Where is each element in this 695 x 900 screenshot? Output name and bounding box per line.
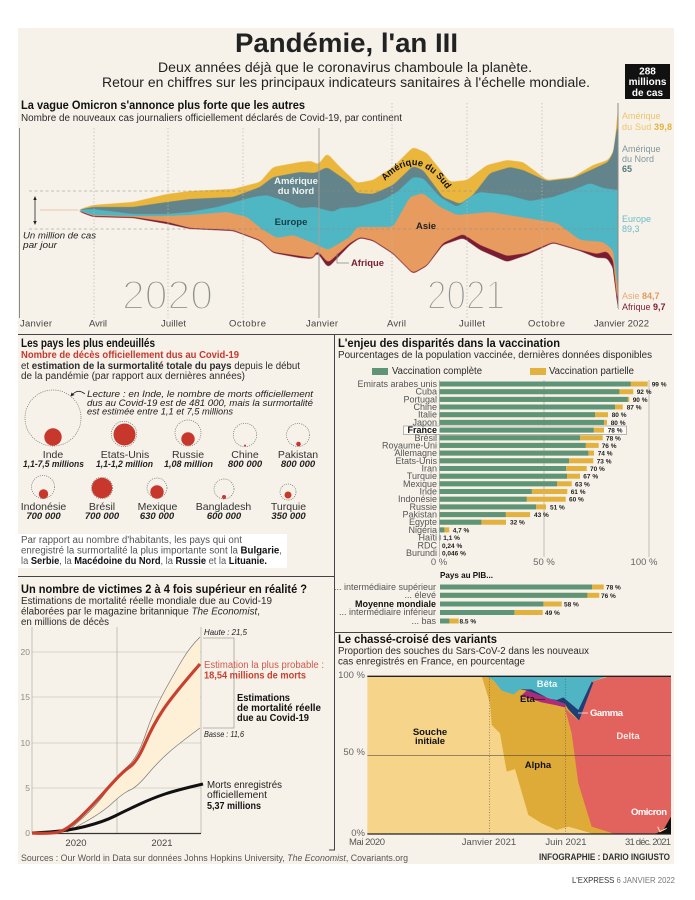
subtitle: Deux années déjà que le coronavirus chamboule la planète. xyxy=(158,60,532,75)
row: Indonésie xyxy=(398,494,584,504)
subtitle xyxy=(102,60,590,90)
stream chart xyxy=(40,114,618,310)
row: Egypte: 32 % xyxy=(510,520,525,527)
scale label: par jour xyxy=(22,240,58,250)
circle: Pakistan: 800 000 xyxy=(281,459,316,470)
legend: Vaccination complète xyxy=(392,366,482,377)
row: Cuba: Cuba xyxy=(415,387,437,397)
row: Haïti: 1,1 % xyxy=(443,535,460,542)
circle: Brésil: Brésil xyxy=(89,501,115,513)
label: Amérique du Sud: Amérique du Sud xyxy=(382,160,452,189)
grid lines xyxy=(440,380,649,557)
line chart xyxy=(21,627,234,849)
row: Emirats arabes unis xyxy=(357,379,667,389)
circle: Russie xyxy=(164,420,213,470)
row: Indonésie: 60 % xyxy=(569,497,584,504)
x axis: 31 déc. 2021 xyxy=(625,837,671,848)
note: surmortalité par habitant: enregistré la surmortalité la plus importante sont la Bulgarie, xyxy=(21,546,282,556)
row: intermédiaire supérieur: ... intermédiaire supérieur xyxy=(334,582,436,592)
label: Souche initiale xyxy=(413,727,447,747)
row: RDC xyxy=(418,540,462,550)
circle: Turquie: 350 000 xyxy=(271,511,306,522)
row: Inde xyxy=(419,486,586,496)
label: estimations de mortalité: Estimations xyxy=(237,693,291,704)
description: Pourcentages de la population vaccinée, dernières données disponibles xyxy=(338,350,652,361)
label: Asie: Asie xyxy=(416,221,436,232)
panel: vaccination xyxy=(334,338,667,626)
row: Brésil xyxy=(414,433,621,443)
circle: Etats-Unis xyxy=(96,421,153,470)
heading: Le chassé-croisé des variants xyxy=(338,634,497,646)
label: estimations de mortalité: de mortalité réelle xyxy=(237,703,322,714)
y axis xyxy=(338,670,366,839)
time axis: Juillet xyxy=(161,318,186,330)
end labels: 89,3 xyxy=(622,224,640,234)
circle: Mexique: 630 000 xyxy=(140,511,175,522)
row: intermédiaire inférieur xyxy=(339,607,560,617)
description xyxy=(21,350,300,382)
percentage axis: 100 % xyxy=(631,557,658,568)
row: Iran: Iran xyxy=(421,464,437,474)
lecture note: est estimée entre 1,1 et 7,5 millions xyxy=(87,406,233,418)
end labels: Asie 84,7 xyxy=(622,291,660,301)
label: Souche initiale: initiale xyxy=(415,736,445,747)
row: Japon: Japon xyxy=(412,417,437,427)
title: Pandémie, l'an III xyxy=(235,28,458,58)
time axis: Juillet xyxy=(459,318,485,330)
note: surmortalité par habitant: la Serbie, la Macédoine du Nord, la Russie et la Lituanie. xyxy=(21,556,267,567)
row: Inde: Inde xyxy=(419,486,437,496)
row: Allemagne: 74 % xyxy=(598,451,613,458)
row: intermédiaire inférieur: ... intermédiaire inférieur xyxy=(339,607,436,617)
scale label xyxy=(22,230,97,250)
row: intermédiaire supérieur xyxy=(334,582,621,592)
line chart: 10 xyxy=(21,738,30,748)
line chart: 2021 xyxy=(151,838,173,849)
circle: Inde xyxy=(23,390,84,470)
row: Turquie: Turquie xyxy=(407,471,437,481)
circle: Brésil: 700 000 xyxy=(85,511,120,522)
circle: Etats-Unis: 1,1-1,2 million xyxy=(96,459,153,470)
row: Nigeria: Nigéria xyxy=(408,525,437,535)
row: Japon: 80 % xyxy=(611,420,626,427)
circle: Bangladesh xyxy=(196,479,251,522)
label: morts enregistrés: officiellement xyxy=(207,790,267,801)
row: Nigeria xyxy=(408,525,470,535)
sources: Sources : Our World in Data sur données Johns Hopkins University, The Economist, Covariants.org xyxy=(21,853,408,864)
circle: Etats-Unis: Etats-Unis xyxy=(101,449,149,461)
row: Italie: 80 % xyxy=(612,412,627,419)
arrow: un million xyxy=(33,196,37,225)
row: Egypte xyxy=(409,517,525,527)
label: estimation probable xyxy=(204,660,324,682)
dividers xyxy=(18,334,672,850)
row: France xyxy=(407,425,623,435)
row: Indonésie: Indonésie xyxy=(398,494,437,504)
description: élaborées par le magazine britannique The Economist, xyxy=(21,606,260,618)
line chart: 0 xyxy=(25,828,30,838)
row: Russie: 51 % xyxy=(550,504,565,511)
description: Proportion des souches du Sars-CoV-2 dans les nouveaux xyxy=(338,646,589,657)
label: estimations de mortalité: due au Covid-19 xyxy=(237,713,310,724)
row: Emirats arabes unis: Emirats arabes unis xyxy=(357,379,437,389)
label: morts enregistrés xyxy=(207,780,282,812)
row: France: 78 % xyxy=(608,428,623,435)
label: Amérique du Nord: du Nord xyxy=(278,186,314,197)
heading: Un nombre de victimes 2 à 4 fois supérieur en réalité ? xyxy=(21,584,307,596)
row: Burundi: Burundi xyxy=(406,548,437,558)
label: morts enregistrés: Morts enregistrés xyxy=(207,780,282,791)
panel: vague Omicron xyxy=(19,100,672,330)
time axis: Janvier xyxy=(20,318,52,330)
row: Brésil: Brésil xyxy=(414,433,437,443)
end labels: 65 xyxy=(622,164,632,174)
row: Chine xyxy=(413,402,642,412)
row: Cuba: 92 % xyxy=(637,389,652,396)
row: élevé: 76 % xyxy=(601,593,616,600)
circle: Chine xyxy=(228,423,263,470)
description: en millions de décès xyxy=(21,617,109,628)
description: de la pandémie (par rapport aux dernières années) xyxy=(21,371,245,382)
label: Eta xyxy=(520,694,545,705)
circle: Inde: 1,1-7,5 millions xyxy=(23,459,84,470)
row: Burundi xyxy=(406,548,466,558)
time axis: Avril xyxy=(387,318,406,330)
description xyxy=(338,646,589,668)
subtitle: Retour en chiffres sur les principaux indicateurs sanitaires à l'échelle mondiale. xyxy=(102,75,590,90)
callout: 288 millions de cas: millions xyxy=(629,77,667,88)
year label 2020: 2020 xyxy=(122,272,213,318)
label: estimation probable: 18,54 millions de morts xyxy=(204,670,307,682)
callout: 288 millions de cas: 288 xyxy=(639,66,656,78)
time axis: Avril xyxy=(89,318,107,330)
circle: Chine: 800 000 xyxy=(228,459,263,470)
scale label: Un million de cas xyxy=(23,230,97,240)
row: Mexique: Mexique xyxy=(403,479,437,489)
circle: Pakistan: Pakistan xyxy=(278,449,318,461)
label: Europe: Europe xyxy=(275,217,307,228)
guides xyxy=(20,103,618,318)
circle: Indonésie: Indonésie xyxy=(21,501,66,513)
label: Delta: Delta xyxy=(616,731,640,742)
line chart: 2020 xyxy=(65,838,87,849)
row: Chine: Chine xyxy=(413,402,437,412)
end labels: Amérique xyxy=(622,144,661,154)
row: Burundi: 0,046 % xyxy=(442,550,466,558)
legend: Vaccination partielle xyxy=(549,366,634,377)
y axis: 50 % xyxy=(343,747,366,758)
label: Bêta: Bêta xyxy=(537,679,558,690)
row: Iran xyxy=(421,464,605,474)
heading: La vague Omicron s'annonce plus forte que les autres xyxy=(21,100,305,112)
circle: Inde: Inde xyxy=(43,449,63,461)
row: Portugal xyxy=(403,394,648,404)
row: Russie xyxy=(409,502,565,512)
circle: Indonésie xyxy=(21,476,66,522)
note: surmortalité par habitant xyxy=(17,534,287,568)
time axis: Octobre xyxy=(528,318,565,330)
row: bas: 8.5 % xyxy=(460,618,476,626)
row: Portugal: Portugal xyxy=(403,394,437,404)
row: bas xyxy=(411,616,476,626)
row: Allemagne: Allemagne xyxy=(394,448,437,458)
lecture note: dus au Covid-19 est de 481 000, mais la surmortalité xyxy=(87,398,313,409)
row: Inde: 61 % xyxy=(571,489,586,496)
description: Nombre de décès officiellement dus au Covid-19 xyxy=(21,350,239,361)
circle: Turquie: Turquie xyxy=(271,501,306,513)
row: Allemagne xyxy=(394,448,613,458)
description: Estimations de mortalité réelle mondiale due au Covid-19 xyxy=(21,596,272,607)
row: intermédiaire supérieur: 78 % xyxy=(606,584,621,592)
row: bas: ... bas xyxy=(411,616,436,626)
x axis: Mai 2020 xyxy=(349,837,385,848)
line chart: 20 xyxy=(21,647,30,657)
label: basse: Basse : 11,6 xyxy=(204,729,244,739)
row: élevé xyxy=(404,590,616,600)
label: morts enregistrés: 5,37 millions xyxy=(207,801,261,812)
year label 2021: 2021 xyxy=(427,272,505,318)
percentage axis xyxy=(431,557,658,568)
x axis xyxy=(349,837,671,848)
description: cas enregistrés en France, en pourcentage xyxy=(338,656,525,668)
panel: nombre de victimes xyxy=(21,584,324,849)
row: Egypte: Egypte xyxy=(409,517,437,527)
lecture note: Lecture : en Inde, le nombre de morts officiellement xyxy=(87,389,313,400)
row: Haïti xyxy=(418,533,460,543)
row: Turquie xyxy=(407,471,598,481)
row: moyenne mondiale: Moyenne mondiale xyxy=(355,599,436,609)
circle: Brésil xyxy=(85,477,120,522)
row: Royaume-Uni: Royaume-Uni xyxy=(382,440,437,450)
note: surmortalité par habitant: Par rapport au nombre d'habitants, les pays qui ont xyxy=(21,535,242,546)
label: estimation probable: Estimation la plus probable : xyxy=(204,660,324,671)
heading: Les pays les plus endeuillés xyxy=(21,338,155,350)
label: Alpha: Alpha xyxy=(525,760,552,771)
x axis: Juin 2021 xyxy=(545,837,587,848)
circle: Russie: Russie xyxy=(172,449,204,461)
row: Royaume-Uni xyxy=(382,440,617,450)
row: Pakistan xyxy=(402,510,549,520)
row: France: France xyxy=(407,425,437,435)
label: estimations de mortalité xyxy=(237,693,322,724)
row: Italie xyxy=(418,410,627,420)
end labels: Afrique 9,7 xyxy=(622,302,666,312)
row: Pakistan: 43 % xyxy=(534,512,549,519)
callout: 288 millions de cas xyxy=(625,64,670,99)
row: Pakistan: Pakistan xyxy=(402,510,437,520)
description: et estimation de la surmortalité totale du pays depuis le début xyxy=(21,361,300,372)
panel: pays les plus endeuillés xyxy=(17,338,318,568)
row: RDC: RDC xyxy=(418,540,437,550)
circle: Mexique: Mexique xyxy=(138,501,177,513)
row: Etats-Unis xyxy=(395,456,612,466)
time axis: Janvier xyxy=(306,318,338,330)
end labels xyxy=(622,111,672,312)
label: Gamma: Gamma xyxy=(590,708,624,719)
row: moyenne mondiale: 58 % xyxy=(564,602,579,608)
row: Japon xyxy=(412,417,626,427)
row: Mexique: 63 % xyxy=(575,481,590,488)
row: Etats-Unis: 73 % xyxy=(597,458,612,465)
circle: Chine: Chine xyxy=(231,449,259,461)
heading: L'enjeu des disparités dans la vaccination xyxy=(338,338,560,350)
description xyxy=(21,596,272,628)
time axis: Octobre xyxy=(229,318,266,330)
label: Souche initiale: Souche xyxy=(413,727,447,738)
y axis: 100 % xyxy=(338,670,366,681)
description: Nombre de nouveaux cas journaliers officiellement déclarés de Covid-19, par continent xyxy=(21,113,402,124)
row: intermédiaire inférieur: 49 % xyxy=(545,610,560,617)
time axis: Janvier 2022 xyxy=(594,318,649,330)
percentage axis: 50 % xyxy=(533,557,555,568)
label: Eta: Eta xyxy=(520,694,536,705)
row: Mexique xyxy=(403,479,590,489)
row: Brésil: 78 % xyxy=(606,435,621,442)
highlight: France xyxy=(404,426,626,434)
legend xyxy=(372,366,634,377)
row: Haïti: Haïti xyxy=(418,533,437,543)
percentage axis: 0 % xyxy=(431,557,448,568)
row: Royaume-Uni: 76 % xyxy=(602,443,617,450)
end labels: Europe xyxy=(622,214,651,224)
row: Turquie: 67 % xyxy=(583,474,598,481)
callout: 288 millions de cas: de cas xyxy=(632,88,664,99)
row: Emirats arabes unis: 99 % xyxy=(652,382,667,388)
row: Cuba xyxy=(415,387,652,397)
credit: INFOGRAPHIE : DARIO INGIUSTO xyxy=(539,852,670,863)
row: élevé: ... élevé xyxy=(404,590,436,600)
circle: Pakistan xyxy=(278,424,318,470)
label: Omicron: Omicron xyxy=(631,807,667,818)
circle: Mexique xyxy=(138,478,177,522)
end labels: du Nord xyxy=(622,154,654,164)
label: Afrique xyxy=(337,253,384,269)
label: Amérique du Nord xyxy=(274,176,318,197)
label: Afrique: Afrique xyxy=(351,258,384,269)
x axis: Janvier 2021 xyxy=(462,837,516,848)
row: RDC: 0,24 % xyxy=(442,543,462,550)
end labels: Amérique xyxy=(622,111,661,121)
label: haute: Haute : 21,5 xyxy=(204,627,247,637)
circle: Turquie xyxy=(271,484,306,522)
stacked area chart xyxy=(367,676,671,834)
circle: Bangladesh: 600 000 xyxy=(207,511,242,522)
label: Amérique du Nord: Amérique xyxy=(274,176,318,187)
circle: Indonésie: 700 000 xyxy=(26,511,61,522)
row: Portugal: 90 % xyxy=(633,397,648,404)
row: Russie: Russie xyxy=(409,502,437,512)
circle: Bangladesh: Bangladesh xyxy=(196,501,251,513)
y axis: 0% xyxy=(351,828,366,839)
row: Nigeria: 4,7 % xyxy=(453,527,470,534)
end labels: du Sud 39,8 xyxy=(622,122,672,132)
row: Chine: 87 % xyxy=(627,404,642,412)
line chart: 5 xyxy=(25,783,30,793)
panel: variants xyxy=(338,634,671,848)
row: moyenne mondiale xyxy=(355,599,579,609)
sub-heading: pays au PIB: Pays au PIB... xyxy=(440,570,493,580)
row: Etats-Unis: Etats-Unis xyxy=(395,456,437,466)
row: Italie: Italie xyxy=(418,410,437,420)
time axis xyxy=(20,318,649,330)
circle: Russie: 1,08 million xyxy=(164,459,213,470)
row: Iran: 70 % xyxy=(590,466,605,473)
lecture note xyxy=(70,389,313,418)
publication line: L'EXPRESS 6 JANVIER 2022 xyxy=(572,875,675,885)
line chart: 15 xyxy=(21,692,30,702)
